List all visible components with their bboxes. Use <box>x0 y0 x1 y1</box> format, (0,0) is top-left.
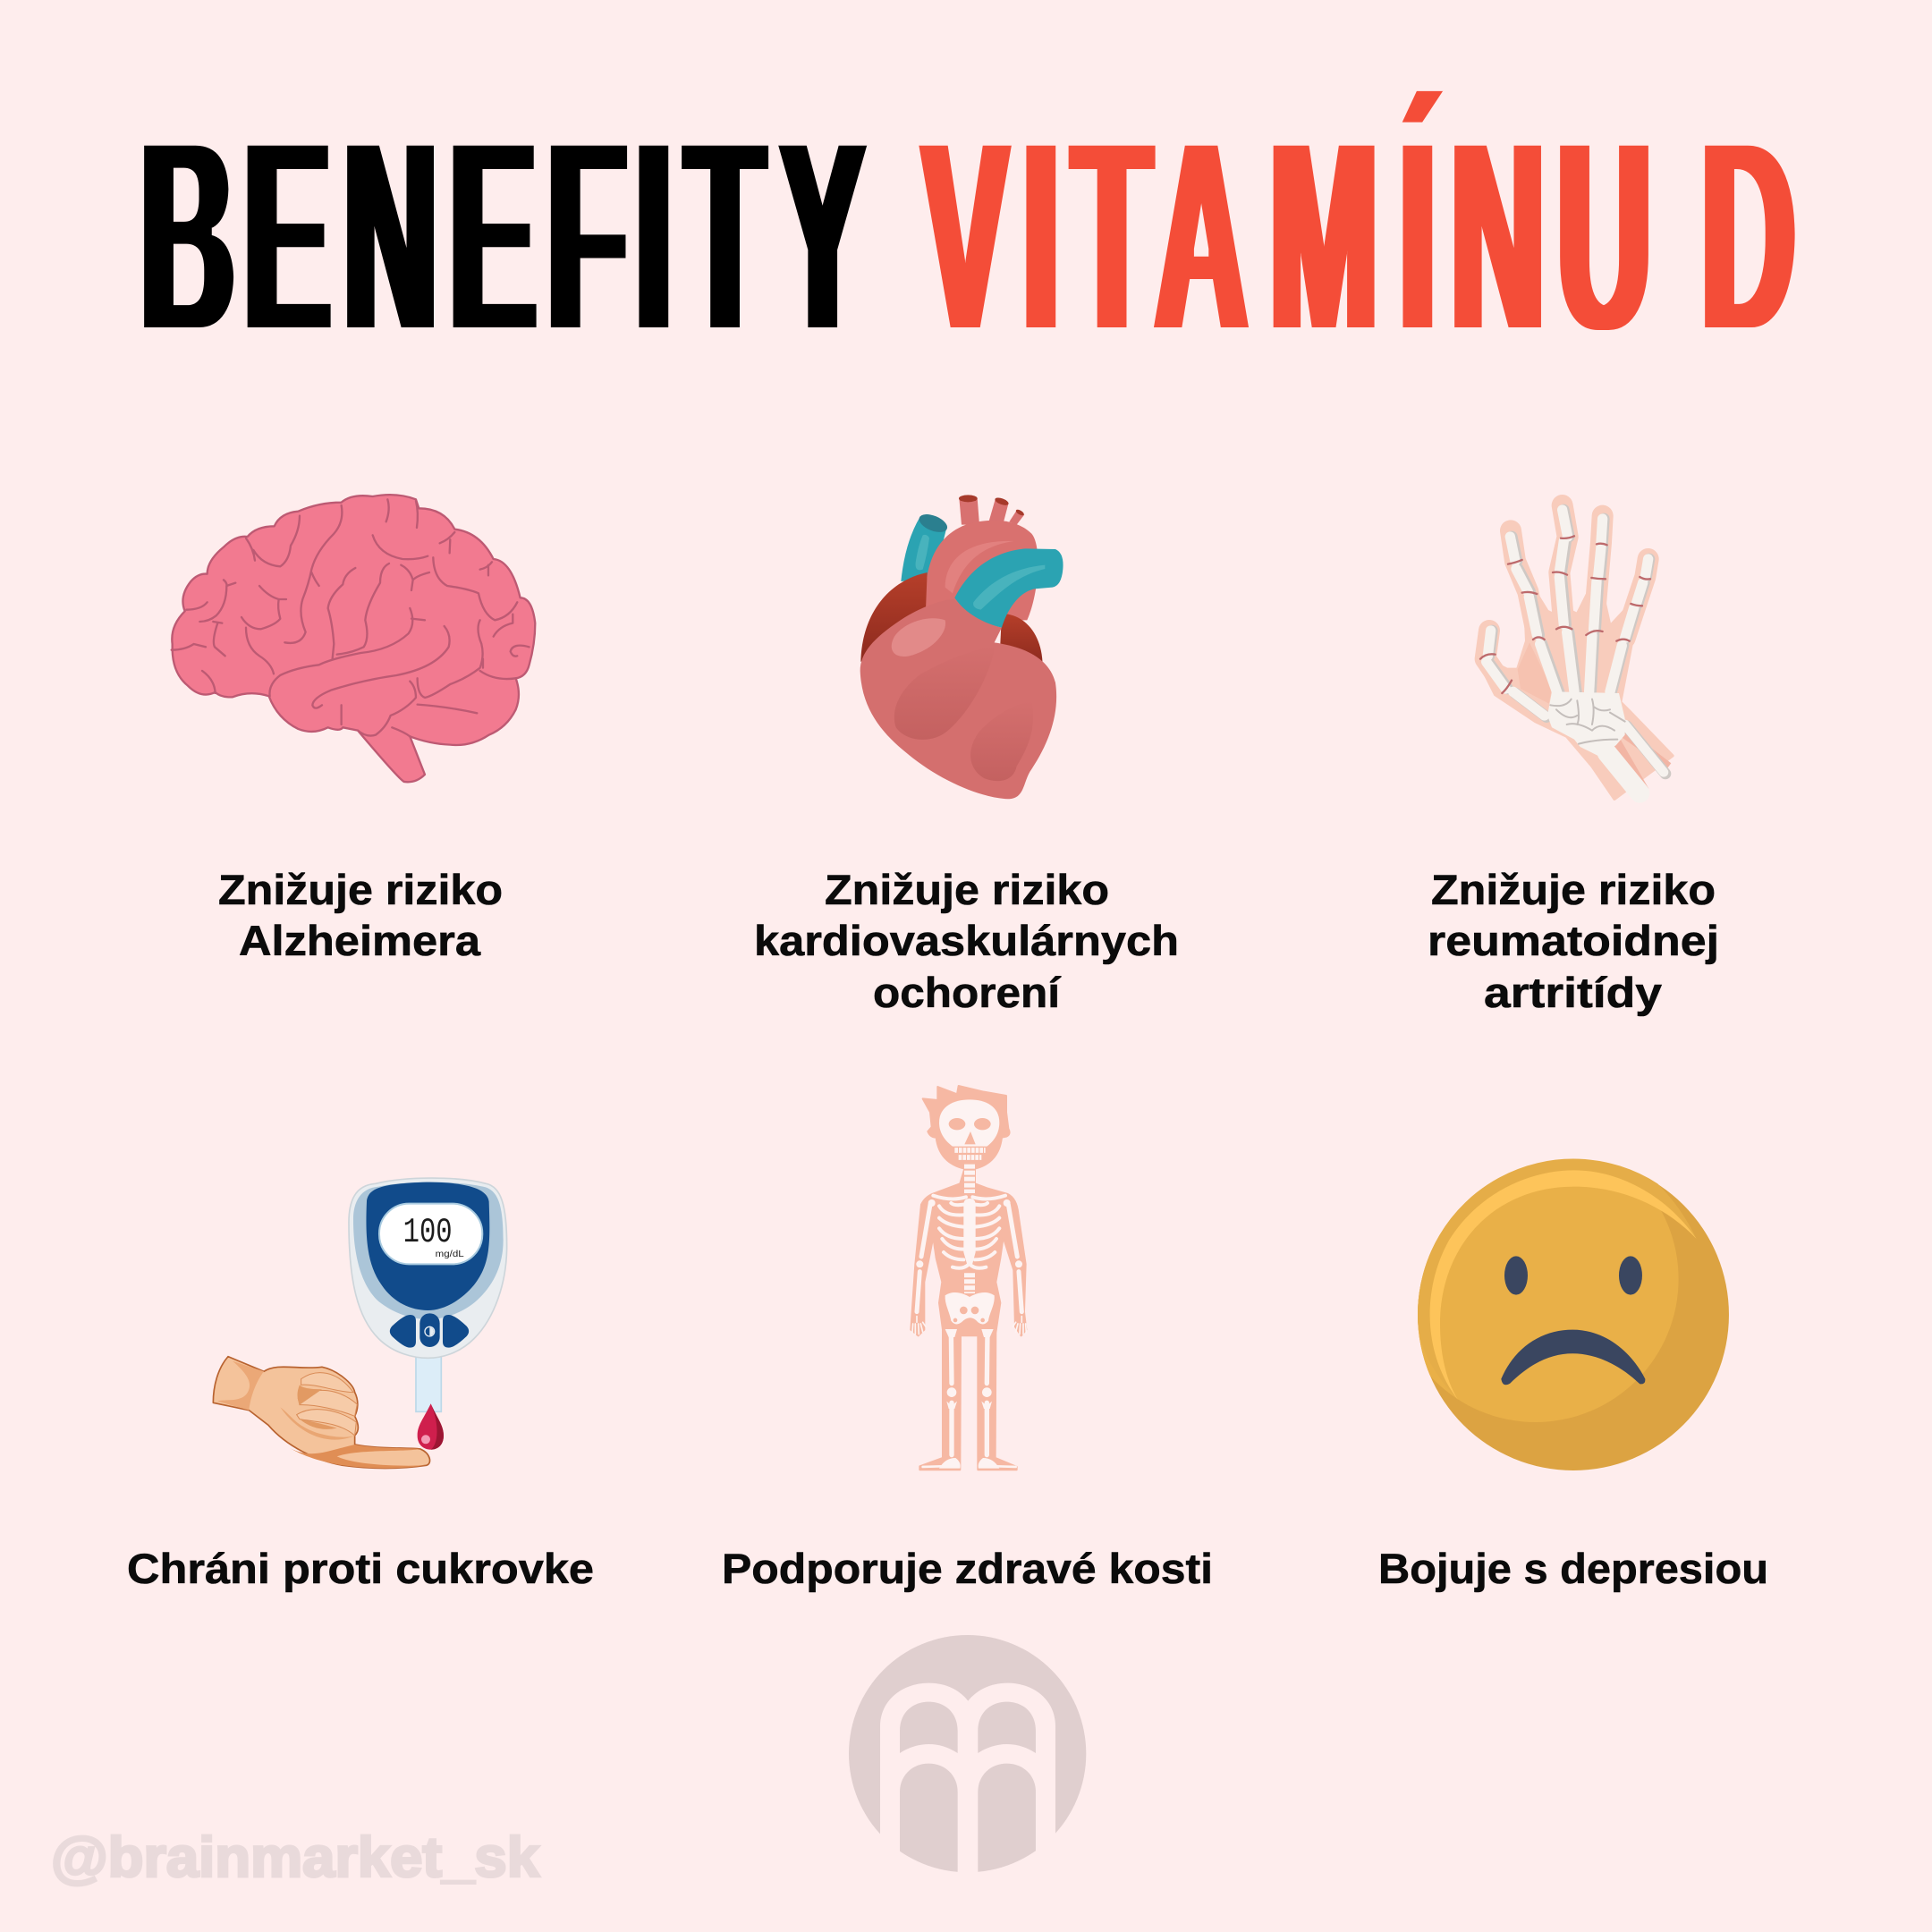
bones <box>1488 510 1665 794</box>
icon: skeleton <box>911 1086 1026 1470</box>
pelvis <box>945 1292 995 1324</box>
label: depression: Bojuje s depresiou <box>1378 1545 1768 1592</box>
skull <box>939 1099 999 1147</box>
left bones <box>912 1196 969 1469</box>
icon: brain <box>172 495 535 782</box>
body silhouette <box>911 1086 1026 1470</box>
label: cardiovascular: ochorení <box>873 969 1062 1016</box>
label: Alzheimer: Alzheimera <box>239 917 481 964</box>
label: cardiovascular: kardiovaskulárnych <box>754 917 1179 964</box>
wrist bones <box>1547 691 1625 756</box>
buttons <box>390 1315 469 1348</box>
icon: glucose meter with hand: 100 <box>403 1212 453 1252</box>
meter body <box>349 1178 507 1358</box>
screen <box>379 1204 482 1264</box>
icon: glucose meter with hand <box>213 1178 507 1468</box>
label: arthritis: Znižuje riziko <box>1431 866 1716 913</box>
label: arthritis: reumatoidnej <box>1428 917 1719 964</box>
icon: heart <box>860 495 1063 799</box>
title: BENEFITY <box>140 82 866 389</box>
spine and sternum <box>953 1165 986 1293</box>
logo <box>849 1635 1086 1887</box>
label: arthritis <box>1428 866 1719 1016</box>
title <box>140 82 1795 389</box>
blood drop <box>418 1403 444 1450</box>
icon: sad face <box>1418 1159 1729 1470</box>
skin silhouette <box>1483 572 1673 799</box>
label: Alzheimer <box>218 866 503 964</box>
label: bones: Podporuje zdravé kosti <box>722 1545 1213 1592</box>
label: diabetes: Chráni proti cukrovke <box>127 1545 594 1592</box>
label: cardiovascular <box>754 866 1179 1016</box>
right bones <box>970 1196 1026 1469</box>
test strip <box>416 1357 441 1411</box>
icon: glucose meter with hand: mg/dL <box>436 1250 464 1259</box>
icon: arthritic hand <box>1480 505 1673 799</box>
title: VITAMÍNU D <box>922 82 1795 389</box>
label: cardiovascular: Znižuje riziko <box>825 866 1109 913</box>
inflamed joints <box>1480 536 1650 693</box>
label: Alzheimer: Znižuje riziko <box>218 866 503 913</box>
hand <box>213 1357 430 1468</box>
label: arthritis: artritídy <box>1484 969 1662 1016</box>
watermark handle: @brainmarket_sk <box>51 1826 540 1889</box>
